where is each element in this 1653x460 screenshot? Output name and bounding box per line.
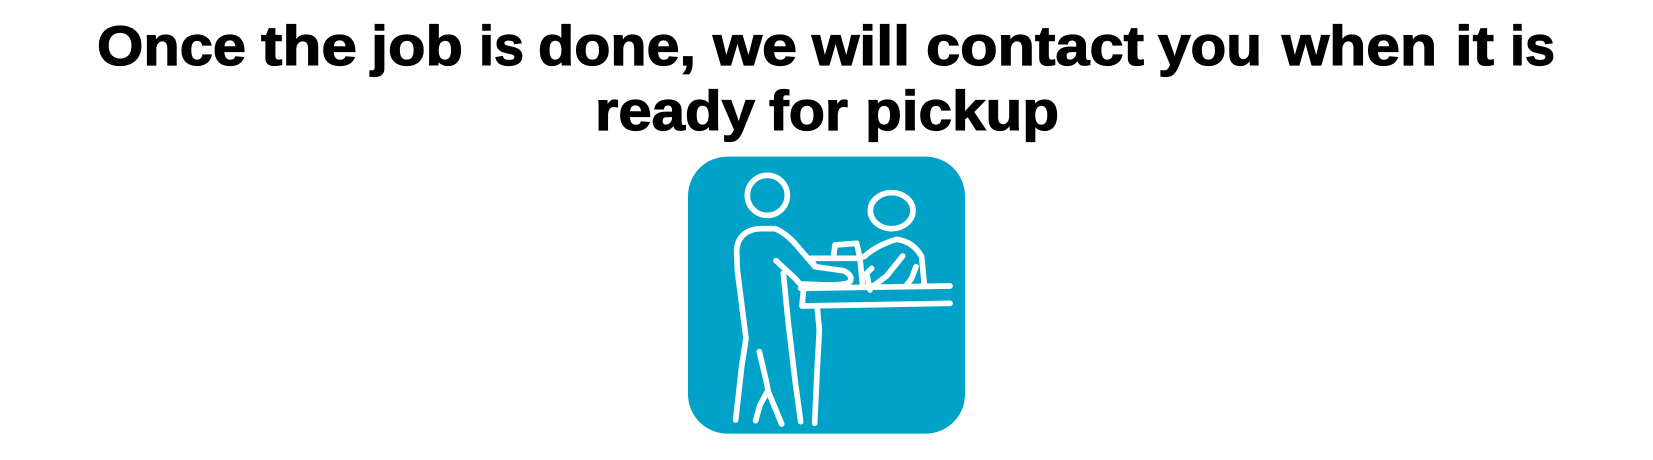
title: contact bbox=[926, 14, 1144, 77]
icon: customer handing item over a service counter bbox=[688, 157, 965, 434]
title: the bbox=[261, 14, 357, 77]
title: is bbox=[479, 14, 524, 77]
title: ready bbox=[595, 79, 755, 142]
title: done, bbox=[538, 14, 696, 77]
title: for bbox=[769, 79, 848, 142]
title: when bbox=[1281, 14, 1437, 77]
title: Once bbox=[97, 14, 246, 77]
title: it bbox=[1455, 14, 1494, 77]
title: you bbox=[1158, 14, 1262, 77]
title: is bbox=[1510, 14, 1555, 77]
title: pickup bbox=[865, 79, 1059, 142]
title: will bbox=[811, 14, 910, 77]
line drawing: two people at counter bbox=[736, 175, 950, 424]
title: job bbox=[370, 14, 463, 77]
icon background bbox=[688, 157, 965, 434]
title bbox=[97, 14, 1555, 142]
title: we bbox=[712, 14, 797, 77]
